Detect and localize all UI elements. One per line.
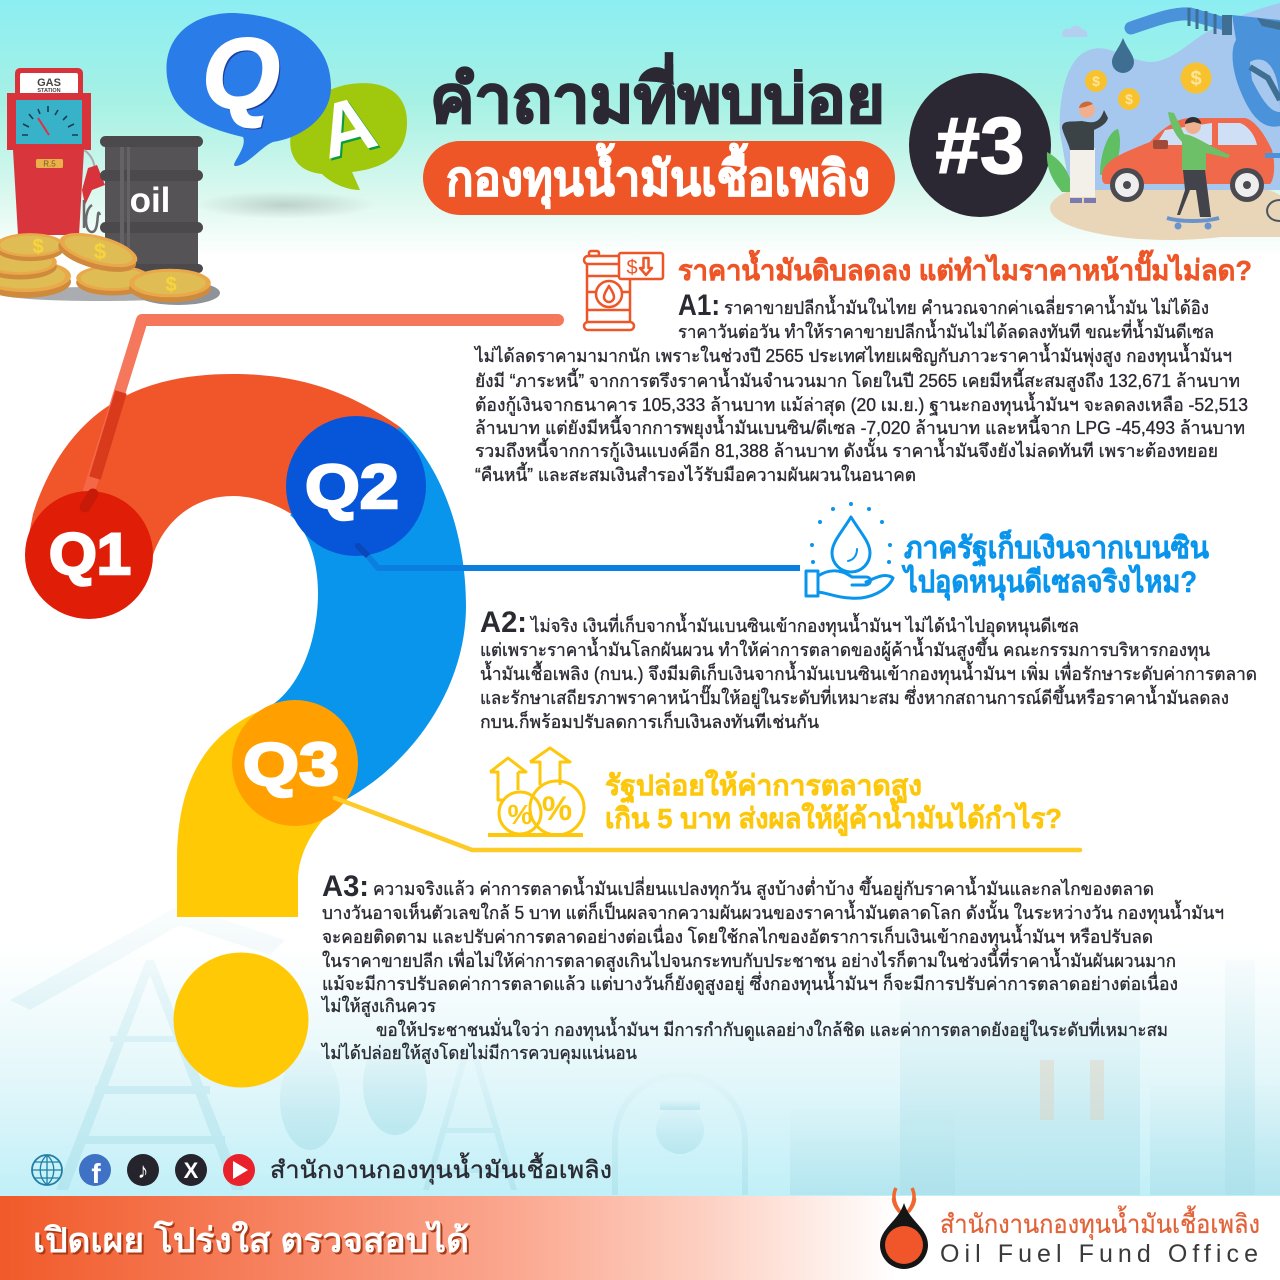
subtitle pill — [423, 141, 895, 215]
badge: Q2: Q2 — [305, 453, 399, 522]
organisation name: สำนักงานกองทุนน้ำมันเชื้อเพลิง — [270, 1152, 612, 1185]
footer band — [0, 1196, 1280, 1280]
illustration: gas pump, oil barrel and coins: $ — [32, 236, 44, 258]
icon: A speech bubble: A — [312, 81, 387, 178]
speech bubble shadow — [195, 191, 375, 219]
badge: Q3 — [232, 700, 358, 826]
answer A2: กบน.ก็พร้อมปรับลดการเก็บเงินลงทันทีเช่นกัน — [480, 710, 819, 732]
answer A3: ไม่ให้สูงเกินควร — [320, 995, 436, 1017]
illustration: fuel nozzle, car and people: $ — [1092, 73, 1100, 89]
answer A2: ไม่จริง เงินที่เก็บจากน้ำมันเบนซินเข้ากองทุนน้ำมันฯ ไม่ได้นำไปอุดหนุนดีเซล — [529, 613, 1079, 637]
icon: oil barrel with price down — [584, 251, 663, 330]
icon: Q speech bubble — [166, 13, 331, 166]
illustration: gas pump, oil barrel and coins: oil — [130, 181, 170, 220]
illustration: fuel nozzle, car and people — [1047, 3, 1280, 240]
question mark: yellow stem — [177, 708, 347, 917]
answer A3: แม้จะมีการปรับลดค่าการตลาดแล้ว แต่บางวันก็ยังดูสูงอยู่ ซึ่งกองทุนน้ำมันฯ ก็จะมีการปรับค่าการตลาดอย่างต่อเนื่อง — [322, 971, 1178, 995]
background: faint industrial silhouettes — [10, 905, 1280, 1195]
answer A3: ขอให้ประชาชนมั่นใจว่า กองทุนน้ำมันฯ มีการกำกับดูแลอย่างใกล้ชิด และค่าการตลาดยังอยู่ในระดับที่เหมาะสม — [376, 1017, 1168, 1041]
badge: #3 — [909, 73, 1051, 217]
illustration: gas pump, oil barrel and coins: $ — [165, 274, 177, 296]
connector overlay: Q1 line on orange arc — [95, 392, 121, 478]
badge: Q1: Q1 — [49, 522, 131, 587]
question mark: orange arc — [25, 374, 400, 560]
answer A1: ไม่ได้ลดราคามามากนัก เพราะในช่วงปี 2565 ประเทศไทยเผชิญกับภาวะราคาน้ำมันพุ่งสูง กองทุนน้ำมันฯ — [473, 343, 1232, 367]
question mark: dot — [174, 952, 308, 1088]
answer A1: ยังมี “ภาระหนี้” จากการตรึงราคาน้ำมันจำนวนมาก โดยในปี 2565 เคยมีหนี้สะสมสูงถึง 132,671 ล้านบาท — [475, 368, 1240, 392]
answer A3 — [320, 870, 1224, 1064]
illustration: gas pump, oil barrel and coins: GAS — [37, 77, 61, 89]
answer A1: ล้านบาท แต่ยังมีหนี้จากการพยุงน้ำมันเบนซิน/ดีเซล -7,020 ล้านบาท และหนี้จาก LPG -45,493 ล้านบาท — [475, 415, 1245, 439]
social icons: f — [91, 1158, 101, 1189]
illustration: gas pump, oil barrel and coins: STATION — [37, 88, 61, 94]
social icons — [32, 1154, 255, 1189]
answer A1: A1: — [678, 289, 720, 322]
answer A3: ไม่ได้ปล่อยให้สูงโดยไม่มีการควบคุมแน่นอน — [320, 1042, 637, 1064]
icon: A speech bubble — [290, 79, 407, 190]
answer A1: รวมถึงหนี้จากการกู้เงินแบงค์อีก 81,388 ล้านบาท ดังนั้น ราคาน้ำมันจึงยังไม่ลดทันที เพราะต้องทยอย — [475, 438, 1218, 462]
icon: A speech bubble: A — [310, 79, 385, 176]
answer A3: จะคอยติดตาม และปรับค่าการตลาดอย่างต่อเนื่อง โดยใช้กลไกของอัตราการเก็บเงินเข้ากองทุนน้ำมันฯ หรือปรับลด — [322, 924, 1153, 948]
icon: Q speech bubble: Q — [202, 18, 280, 130]
answer A2: และรักษาเสถียรภาพราคาหน้าปั๊มให้อยู่ในระดับที่เหมาะสม ซึ่งหากสถานการณ์ดีขึ้นหรือราคาน้ำมันลดลง — [480, 684, 1229, 709]
heading: Q2: ไปอุดหนุนดีเซลจริงไหม? — [901, 564, 1197, 601]
social icons: ♪ — [138, 1158, 148, 1183]
illustration: gas pump, oil barrel and coins: R.5 — [43, 160, 56, 168]
logo wordmark — [940, 1205, 1260, 1268]
badge: Q3: Q3 — [243, 731, 339, 798]
connector: Q3 line — [335, 798, 1080, 850]
icon: water drop over hand — [806, 502, 893, 598]
title: คำถามที่พบบ่อย — [430, 52, 885, 136]
heading: Q2 — [901, 529, 1209, 601]
answer A2 — [480, 606, 1257, 732]
answer A3: บางวันอาจเห็นตัวเลขใกล้ 5 บาท แต่ก็เป็นผลจากความผันผวนของราคาน้ำมันตลาดโลก ดังนั้น ในระหว่างวัน กองทุนน้ำมันฯ — [322, 900, 1224, 924]
social icons: X — [184, 1158, 199, 1183]
answer A2: แต่เพราะราคาน้ำมันโลกผันผวน ทำให้ค่าการตลาดของผู้ค้าน้ำมันสูงขึ้น คณะกรรมการบริหารกองทุน — [480, 637, 1210, 661]
answer A3: ความจริงแล้ว ค่าการตลาดน้ำมันเปลี่ยนแปลงทุกวัน สูงบ้างต่ำบ้าง ขึ้นอยู่กับราคาน้ำมันและกลไกของตลาด — [373, 876, 1154, 900]
connector: Q1 line — [84, 320, 558, 507]
heading: Q2: ภาครัฐเก็บเงินจากเบนซิน — [904, 529, 1209, 568]
answer A2: A2: — [480, 606, 527, 639]
answer A1: “คืนหนี้” และสะสมเงินสำรองไว้รับมือความผันผวนในอนาคต — [475, 462, 916, 485]
question mark: blue arc — [267, 427, 466, 800]
badge: Q1 — [25, 491, 153, 619]
illustration: gas pump, oil barrel and coins: $ — [94, 239, 106, 264]
badge: #3: #3 — [936, 101, 1024, 190]
heading: Q3: เกิน 5 บาท ส่งผลให้ผู้ค้าน้ำมันได้กำไร? — [605, 797, 1062, 836]
badge: Q2 — [286, 416, 426, 556]
answer A3: A3: — [322, 870, 369, 903]
heading: Q1: ราคาน้ำมันดิบลดลง แต่ทำไมราคาหน้าปั๊มไม่ลด? — [678, 249, 1252, 286]
logo wordmark: Oil Fuel Fund Office — [940, 1240, 1258, 1268]
icon: percent coins with up arrows — [488, 748, 584, 835]
icon: percent coins with up arrows: % — [542, 790, 572, 828]
heading: Q3: รัฐปล่อยให้ค่าการตลาดสูง — [605, 769, 922, 804]
illustration: gas pump, oil barrel and coins — [0, 68, 220, 305]
answer A1: ต้องกู้เงินจากธนาคาร 105,333 ล้านบาท แม้ล่าสุด (20 เม.ย.) ฐานะกองทุนน้ำมันฯ จะลดลงเหลือ -52,513 — [475, 392, 1248, 416]
heading: Q3 — [605, 769, 1062, 836]
illustration: fuel nozzle, car and people: $ — [1190, 68, 1202, 90]
icon: Q speech bubble: Q — [204, 20, 282, 132]
answer A3: ในราคาขายปลีก เพื่อไม่ให้ค่าการตลาดสูงเกินไปจนกระทบกับประชาชน อย่างไรก็ตามในช่วงนี้ที่ราคาน้ำมันผันผวนมาก — [322, 948, 1176, 972]
answer A2: น้ำมันเชื้อเพลิง (กบน.) จึงมีมติเก็บเงินจากน้ำมันเบนซินเข้ากองทุนน้ำมันฯ เพิ่ม เพื่อรักษาระดับค่าการตลาด — [480, 661, 1257, 685]
footer band: เปิดเผย โปร่งใส ตรวจสอบได้ — [35, 1222, 471, 1262]
footer band: เปิดเผย โปร่งใส ตรวจสอบได้ — [33, 1220, 469, 1260]
answer A1 — [473, 289, 1248, 485]
answer A1: ราคาวันต่อวัน ทำให้ราคาขายปลีกน้ำมันไม่ได้ลดลงทันที ขณะที่น้ำมันดีเซล — [678, 319, 1214, 342]
connector: Q2 line — [368, 556, 800, 568]
answer A1: ราคาขายปลีกน้ำมันในไทย คำนวณจากค่าเฉลี่ยราคาน้ำมัน ไม่ได้อิง — [724, 295, 1209, 318]
logo: oil drop with flames — [880, 1188, 928, 1269]
illustration: fuel nozzle, car and people: $ — [1125, 91, 1133, 107]
icon: oil barrel with price down: $ — [626, 257, 638, 279]
subtitle pill: กองทุนน้ำมันเชื้อเพลิง — [446, 143, 870, 209]
icon: percent coins with up arrows: % — [508, 799, 533, 830]
